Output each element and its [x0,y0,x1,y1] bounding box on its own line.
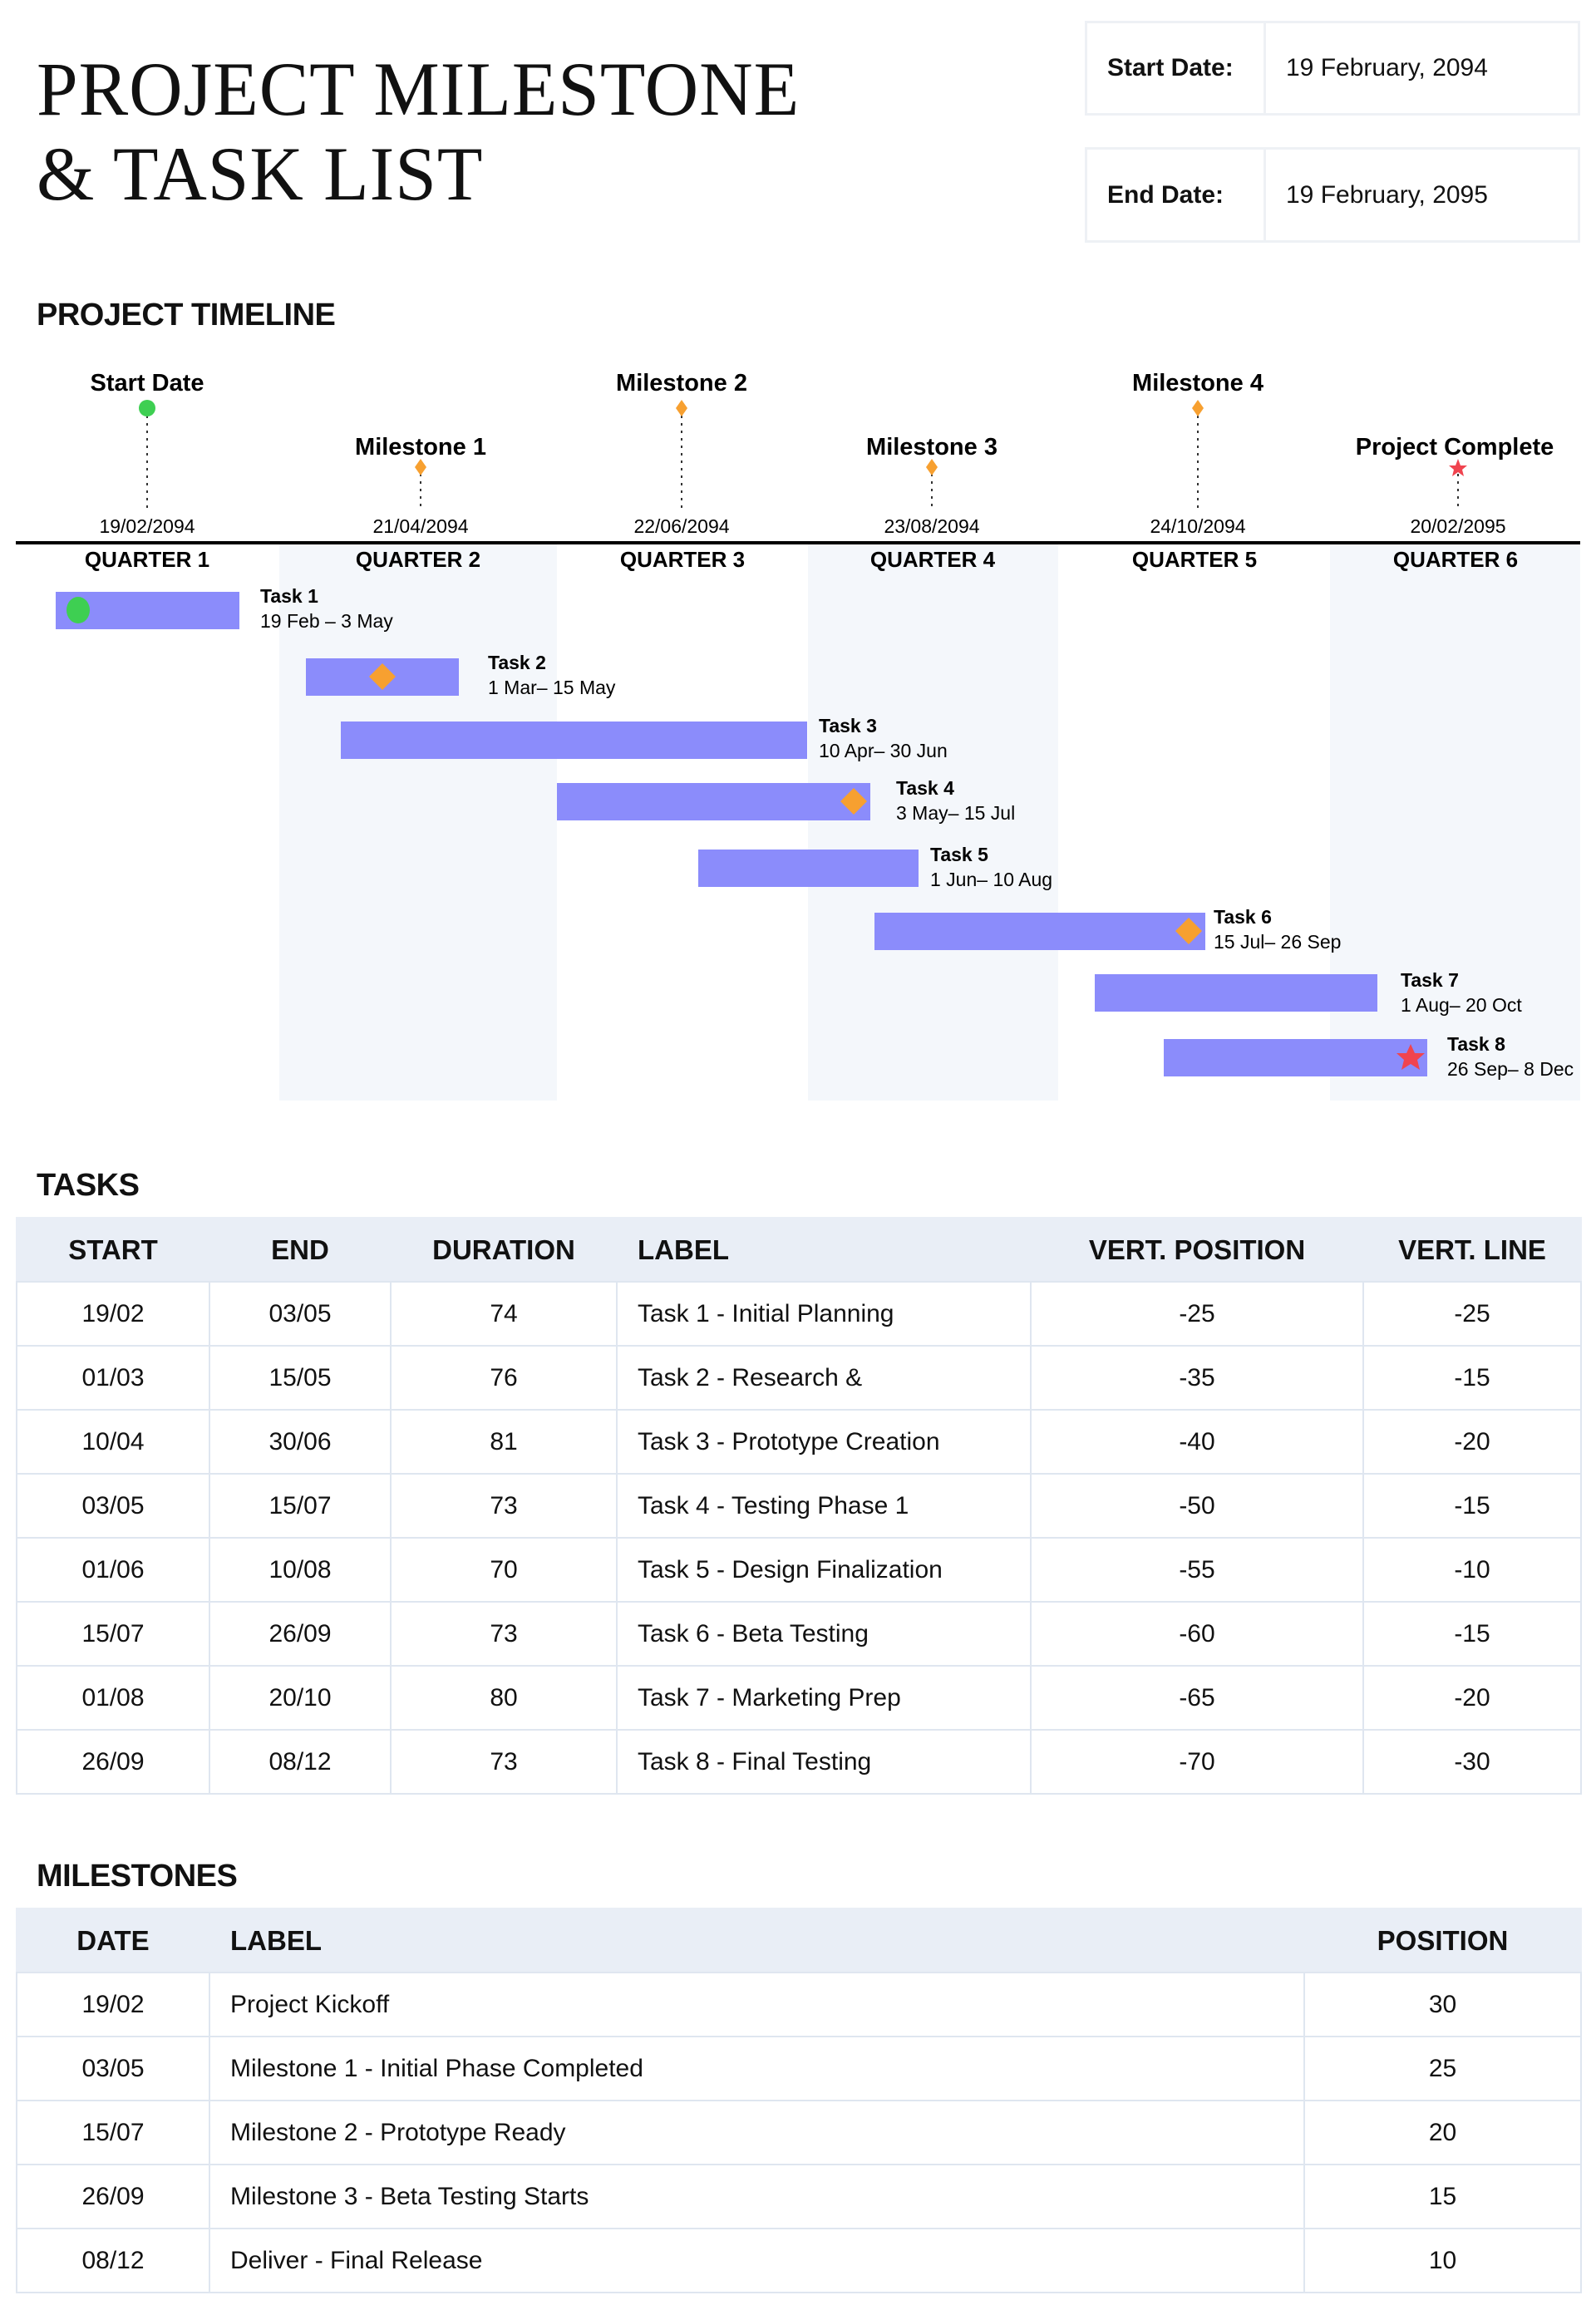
task labels: Task 8 [1447,1033,1505,1055]
title: & TASK LIST [37,131,483,216]
quarter labels: QUARTER 2 [356,547,480,572]
tasks table: 08/12 [268,1747,332,1776]
tasks table: Task 4 - Testing Phase 1 [638,1491,909,1519]
tasks table: Task 1 - Initial Planning [638,1300,894,1327]
task labels: Task 5 [930,844,988,865]
tasks table: Task 6 - Beta Testing [638,1619,869,1647]
tasks table: START [68,1234,158,1265]
tasks table: 73 [490,1491,518,1519]
milestones table: 19/02 [81,1990,145,2018]
milestone dates: 20/02/2095 [1410,515,1506,537]
tasks table: 03/05 [268,1300,332,1327]
milestones table: Milestone 2 - Prototype Ready [230,2118,566,2146]
task labels: Task 2 [488,652,546,673]
tasks table: -65 [1179,1684,1215,1711]
milestones table: 15/07 [81,2118,145,2146]
date box: end [1085,147,1580,243]
task labels: 3 May– 15 Jul [896,802,1015,824]
tasks table: 03/05 [81,1491,145,1519]
tasks table: -30 [1454,1747,1490,1776]
task labels: 19 Feb – 3 May [260,610,393,632]
milestone labels: Milestone 4 [1132,370,1264,396]
quarter labels: QUARTER 5 [1132,547,1257,572]
tasks table: 01/06 [81,1556,145,1583]
tasks table: 80 [490,1684,518,1711]
milestone dates: 22/06/2094 [633,515,730,537]
milestones table: Milestone 1 - Initial Phase Completed [230,2055,643,2081]
milestones table: DATE [76,1925,150,1955]
tasks table: 26/09 [81,1747,145,1776]
tasks table: VERT. POSITION [1089,1234,1305,1265]
milestone dates [99,515,1506,537]
tasks table: Task 7 - Marketing Prep [638,1684,901,1711]
tasks table [16,1217,1582,1795]
heading: tasks: TASKS [37,1168,139,1203]
milestone labels: Project Complete [1356,434,1554,461]
task labels: 15 Jul– 26 Sep [1214,931,1341,953]
quarter labels [85,547,1518,572]
heading: project timeline: PROJECT TIMELINE [37,298,335,332]
tasks table: 70 [490,1556,518,1583]
tasks table: -55 [1179,1556,1215,1583]
milestones table: 25 [1429,2055,1456,2081]
task labels: 1 Mar– 15 May [488,677,616,698]
milestone dates: 24/10/2094 [1150,515,1246,537]
tasks table: -15 [1454,1363,1490,1391]
tasks table: -20 [1454,1428,1490,1455]
tasks table: 01/08 [81,1684,145,1711]
date box: start: Start Date: [1107,54,1234,81]
milestone labels: Start Date [90,370,204,396]
tasks table: END [271,1234,329,1265]
tasks table: DURATION [432,1234,575,1265]
tasks table: Task 8 - Final Testing [638,1747,871,1776]
tasks table: 76 [490,1363,518,1391]
task labels: Task 6 [1214,906,1272,928]
date box: end: End Date: [1107,181,1224,208]
tasks table: 01/03 [81,1363,145,1391]
milestones table: POSITION [1377,1925,1508,1955]
milestones table: 10 [1429,2246,1456,2274]
tasks table: 73 [490,1619,518,1647]
tasks table: -25 [1454,1300,1490,1327]
tasks table: 30/06 [268,1428,332,1455]
task bars [56,592,1427,1076]
milestones table: 20 [1429,2118,1456,2146]
tasks table: -25 [1179,1300,1215,1327]
task labels: 26 Sep– 8 Dec [1447,1058,1574,1080]
quarter labels: QUARTER 1 [85,547,209,572]
milestones table: 15 [1429,2183,1456,2209]
tasks table: 15/05 [268,1363,332,1391]
tasks table: 74 [490,1300,518,1327]
tasks table: -60 [1179,1619,1215,1647]
milestones table [16,1908,1582,2293]
tasks table: 10/04 [81,1428,145,1455]
task labels: Task 3 [819,715,877,736]
tasks table: Task 5 - Design Finalization [638,1556,943,1583]
quarter labels: QUARTER 6 [1393,547,1518,572]
date box: start [1085,21,1580,116]
tasks table: -10 [1454,1556,1490,1583]
milestones table: 03/05 [81,2055,145,2081]
milestone dates: 19/02/2094 [99,515,195,537]
milestone dates: 21/04/2094 [372,515,469,537]
tasks table: 15/07 [268,1491,332,1519]
tasks table: LABEL [638,1234,729,1265]
milestone labels: Milestone 1 [355,434,486,461]
tasks table: -15 [1454,1491,1490,1519]
milestone labels [90,370,1554,461]
quarter labels: QUARTER 3 [620,547,745,572]
tasks table: 20/10 [268,1684,332,1711]
milestones table: 30 [1429,1990,1456,2018]
heading: milestones: MILESTONES [37,1859,237,1894]
title [37,47,800,216]
tasks table: -35 [1179,1363,1215,1391]
task labels: Task 1 [260,585,318,607]
tasks table: 26/09 [268,1619,332,1647]
tasks table: -70 [1179,1747,1215,1776]
title: PROJECT MILESTONE [37,47,800,131]
bar markers [66,597,1425,1070]
tasks table: 81 [490,1428,518,1455]
tasks table: 19/02 [81,1300,145,1327]
tasks table: -20 [1454,1684,1490,1711]
tasks table: 73 [490,1747,518,1776]
tasks table: -15 [1454,1619,1490,1647]
tasks table: 15/07 [81,1619,145,1647]
tasks table: -50 [1179,1491,1215,1519]
timeline chart [16,370,1580,1101]
tasks table: Task 3 - Prototype Creation [638,1428,940,1455]
milestones table: Milestone 3 - Beta Testing Starts [230,2183,589,2209]
tasks table: VERT. LINE [1398,1234,1546,1265]
date box: end: 19 February, 2095 [1286,181,1488,208]
tasks table: 10/08 [268,1556,332,1583]
milestone markers [139,400,1467,476]
task labels: 1 Aug– 20 Oct [1401,994,1522,1016]
milestone labels: Milestone 3 [866,434,998,461]
milestones table: Project Kickoff [230,1990,389,2018]
milestones table: 08/12 [81,2246,145,2274]
quarter labels: QUARTER 4 [870,547,996,572]
milestone dates: 23/08/2094 [884,515,980,537]
task labels [260,585,1574,1080]
date box: start: 19 February, 2094 [1286,54,1488,81]
milestones table: LABEL [230,1925,322,1955]
milestone labels: Milestone 2 [616,370,747,396]
task labels: Task 4 [896,777,954,799]
milestones table: Deliver - Final Release [230,2246,482,2274]
task labels: 1 Jun– 10 Aug [930,869,1052,890]
task labels: 10 Apr– 30 Jun [819,740,948,761]
tasks table: Task 2 - Research & [638,1363,862,1391]
task labels: Task 7 [1401,969,1459,991]
tasks table: -40 [1179,1428,1215,1455]
milestones table: 26/09 [81,2183,145,2209]
